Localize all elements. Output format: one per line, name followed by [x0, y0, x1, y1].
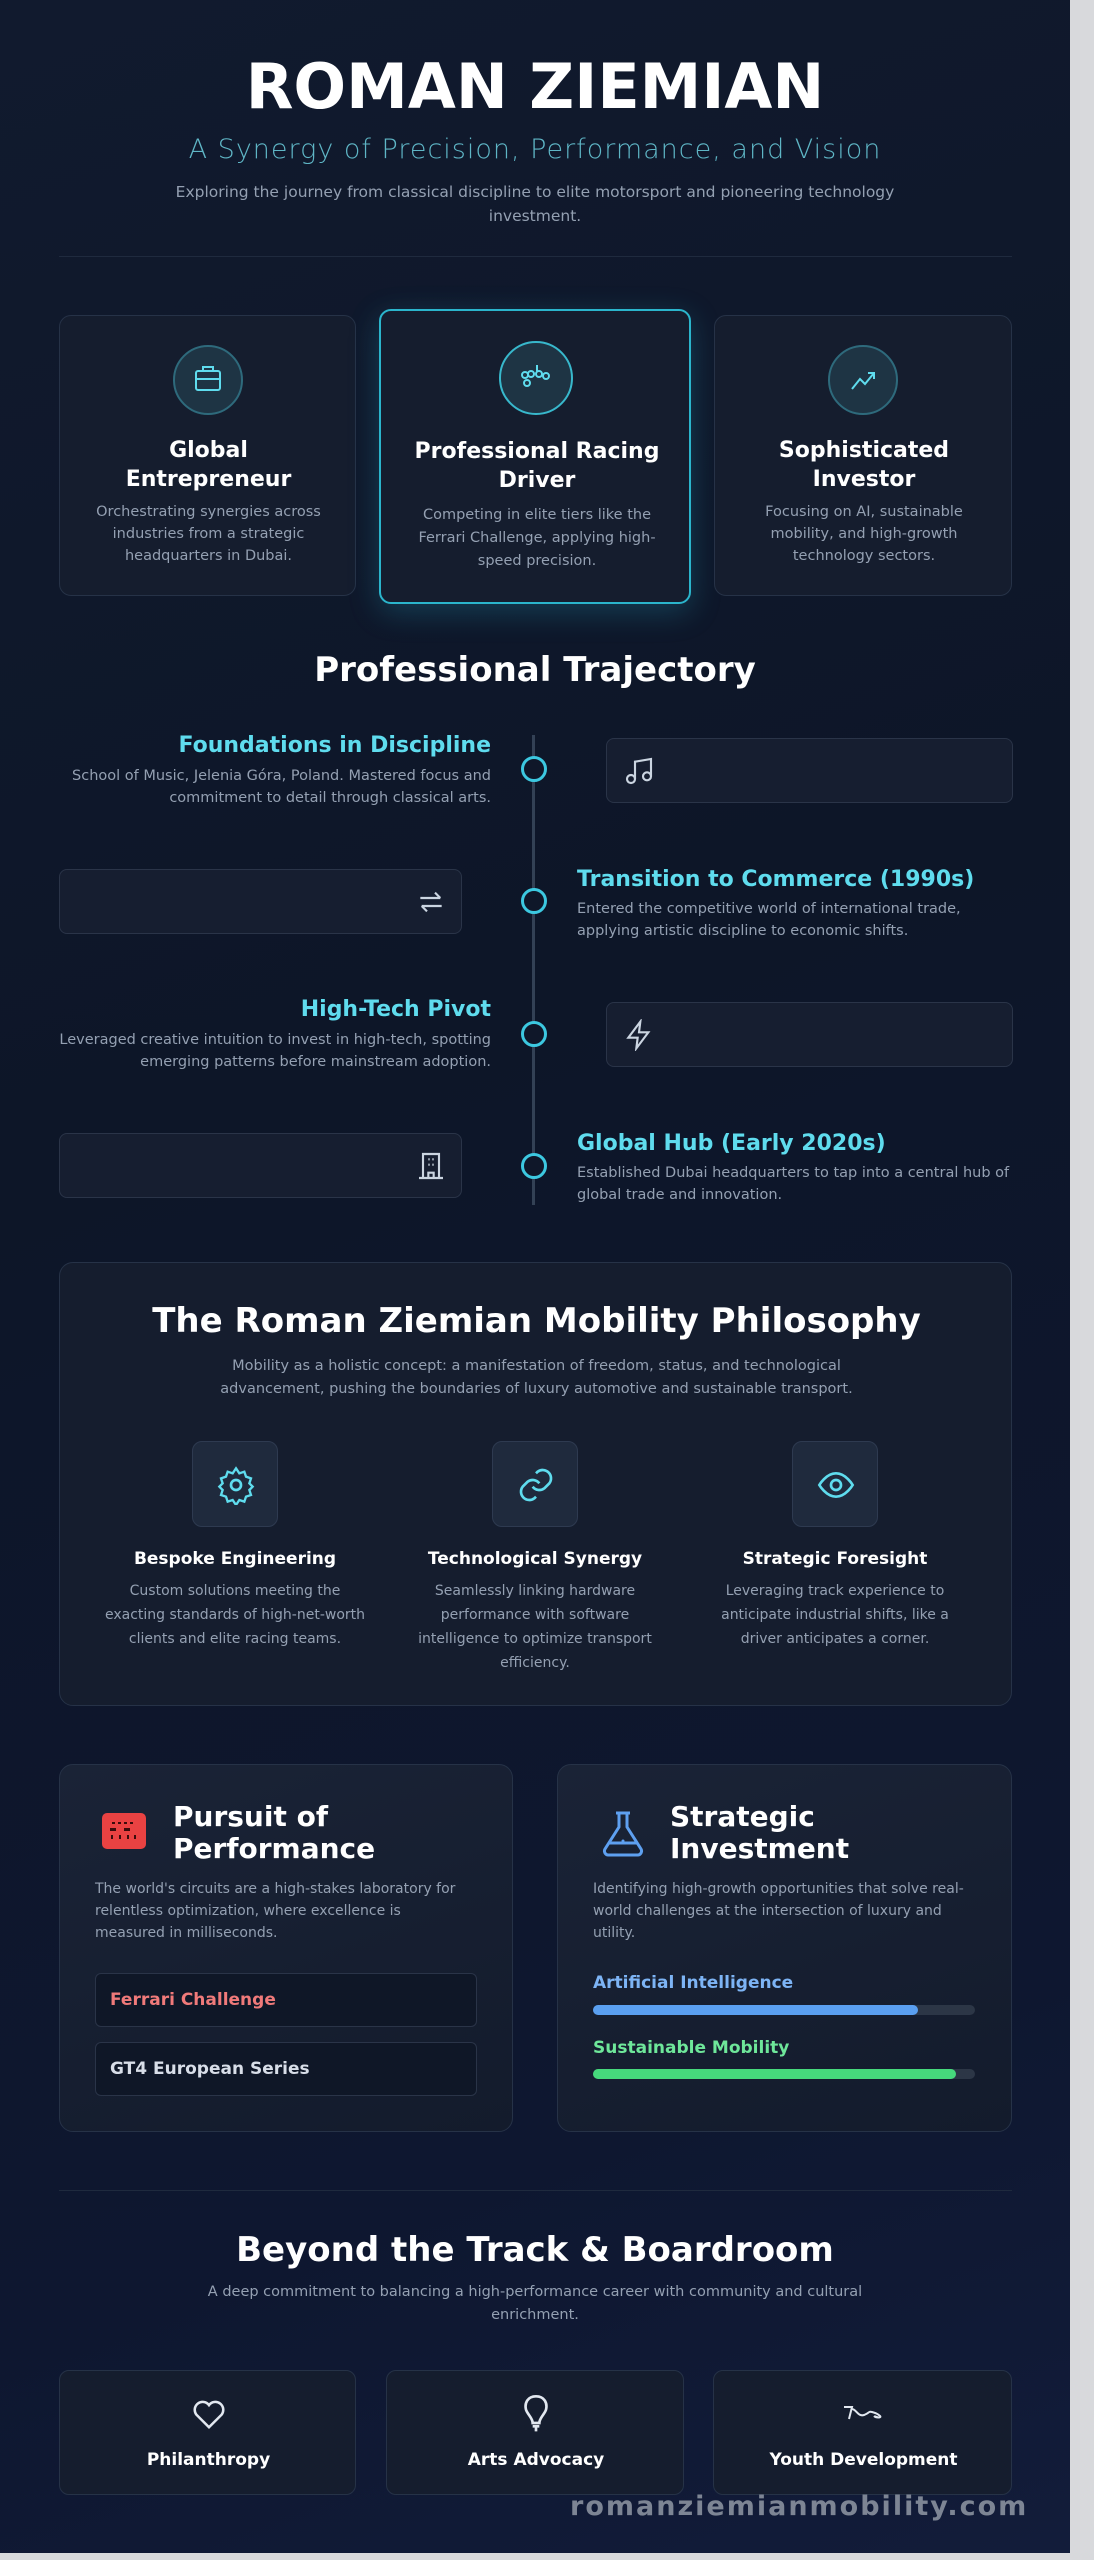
card: Professional Racing Driver — [379, 309, 691, 604]
card: Professional Racing Driver: Professional Racing — [415, 439, 659, 464]
bar: Sustainable Mobility — [593, 2038, 975, 2079]
item 4 — [59, 1131, 1010, 1203]
panel: philosophy: The Roman Ziemian Mobility Philosophy — [152, 1301, 921, 1341]
pillar: Technological Synergy — [418, 1441, 652, 1671]
icon: red racing — [102, 1813, 146, 1849]
card: Sophisticated Investor: Sophisticated — [779, 438, 949, 463]
pillar: Strategic Foresight: Leveraging track experience to anticipate industrial shifts, like a driver anticipates a corner. — [721, 1583, 949, 1647]
panel: philosophy: Mobility as a holistic concept: a manifestation of freedom, status, and technological advancement, pushing the boundaries of luxury automotive and sustainable transport. — [220, 1358, 853, 1397]
panel: Strategic Investment — [557, 1764, 1012, 2132]
item 2: Entered the competitive world of international trade, applying artistic discipline to economic shifts. — [577, 901, 961, 939]
icon: trend — [828, 345, 898, 415]
item: Ferrari Challenge — [95, 1973, 477, 2027]
heading: Professional Trajectory: Professional Trajectory — [314, 650, 756, 690]
icon: flask — [602, 1812, 644, 1856]
timeline — [59, 733, 1013, 1205]
pillar: Bespoke Engineering — [105, 1441, 365, 1647]
icon: racing — [499, 341, 573, 415]
item 4: Established Dubai headquarters to tap into a central hub of global trade and innovation. — [577, 1165, 1009, 1203]
item 3: Leveraged creative intuition to invest in high-tech, spotting emerging patterns before mainstream adoption. — [59, 1032, 491, 1070]
panel: Pursuit of Performance: The world's circuits are a high-stakes laboratory for relentless optimization, where excellence is measured in milliseconds. — [95, 1881, 455, 1941]
pillar: Bespoke Engineering: Bespoke Engineering — [134, 1549, 336, 1569]
item 3: High-Tech Pivot — [301, 997, 491, 1022]
panel: philosophy — [59, 1262, 1012, 1706]
bar: AI — [593, 1973, 975, 2015]
card: Arts Advocacy — [386, 2370, 684, 2495]
pillar: Technological Synergy: Seamlessly linking hardware performance with software intelligence to optimize transport efficiency. — [418, 1583, 652, 1671]
item 3 — [59, 997, 1013, 1070]
panel: Pursuit of Performance: Performance — [173, 1832, 375, 1865]
card: Sophisticated Investor: Focusing on AI, sustainable mobility, and high-growth technology sectors. — [765, 504, 963, 564]
bar: Sustainable Mobility: Sustainable Mobility — [593, 2038, 789, 2058]
card: Philanthropy: Philanthropy — [147, 2450, 270, 2470]
card: Professional Racing Driver: Competing in elite tiers like the Ferrari Challenge, applying high-speed precision. — [418, 507, 656, 569]
card: Global Entrepreneur — [59, 315, 356, 596]
panel: Pursuit of Performance — [59, 1764, 513, 2132]
panel: Strategic Investment: Investment — [670, 1832, 849, 1865]
pillar: Strategic Foresight — [721, 1441, 949, 1647]
card: Global Entrepreneur: Orchestrating synergies across industries from a strategic headquarters in Dubai. — [96, 504, 321, 564]
heading: Beyond the Track: Beyond the Track & Boardroom — [236, 2230, 834, 2270]
card: Arts Advocacy: Arts Advocacy — [468, 2450, 604, 2470]
pillar: Strategic Foresight: Strategic Foresight — [743, 1549, 927, 1569]
panel: Pursuit of Performance: Pursuit of — [173, 1800, 328, 1833]
card: Youth Development — [713, 2370, 1012, 2495]
card: Philanthropy — [59, 2370, 356, 2495]
intro text: Exploring the journey from classical discipline to elite motorsport and pioneering technology investment. — [176, 183, 894, 225]
icon: briefcase — [173, 345, 243, 415]
item 2 — [59, 867, 974, 939]
pillar: Bespoke Engineering: Custom solutions meeting the exacting standards of high-net-worth clients and elite racing teams. — [105, 1583, 365, 1647]
card: Sophisticated Investor — [714, 315, 1012, 596]
item: GT4: GT4 European Series — [110, 2059, 310, 2079]
pillar: Technological Synergy: Technological Synergy — [428, 1549, 642, 1569]
item: GT4 — [95, 2042, 477, 2096]
text: beyond description: A deep commitment to balancing a high-performance career with community and cultural enrichment. — [208, 2284, 862, 2323]
title: ROMAN ZIEMIAN — [246, 50, 824, 123]
watermark: romanziemianmobility.com — [570, 2491, 1028, 2522]
card: Professional Racing Driver: Driver — [499, 468, 575, 493]
item 1: School of Music, Jelenia Góra, Poland. Mastered focus and commitment to detail through classical arts. — [72, 768, 491, 806]
panel: Strategic Investment: Identifying high-growth opportunities that solve real-world challenges at the intersection of luxury and utility. — [593, 1881, 964, 1941]
item 1 — [72, 733, 1013, 806]
item: Ferrari Challenge: Ferrari Challenge — [110, 1990, 276, 2010]
card: Global Entrepreneur: Entrepreneur — [126, 467, 291, 492]
panel: Strategic Investment: Strategic — [670, 1800, 815, 1833]
item 1: Foundations in Discipline — [178, 733, 491, 758]
card: Youth Development: Youth Development — [769, 2450, 958, 2470]
card: Global Entrepreneur: Global — [169, 438, 248, 463]
item 2: Transition to Commerce (1990s) — [577, 867, 974, 892]
subtitle: A Synergy of Precision, Performance, and Vision — [189, 134, 881, 165]
item 4: Global Hub (Early 2020s) — [577, 1131, 886, 1156]
card: Sophisticated Investor: Investor — [813, 467, 915, 492]
bar: AI: Artificial Intelligence — [593, 1973, 793, 1993]
